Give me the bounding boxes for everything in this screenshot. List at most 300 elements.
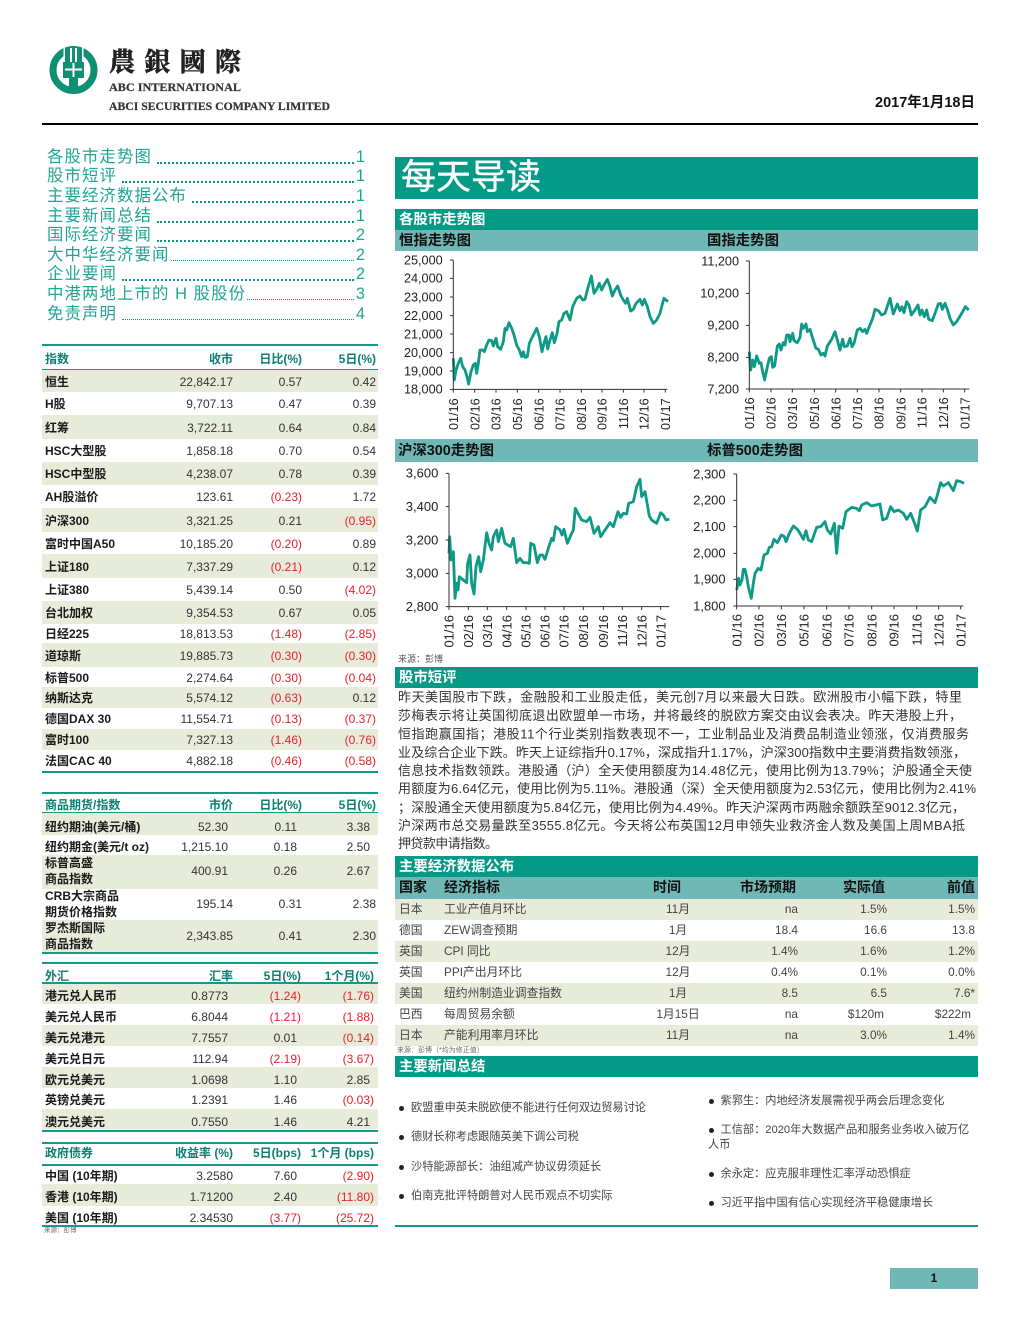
row 中国10年期: 3.2580 <box>196 1169 233 1183</box>
row 罗杰斯国际商品指数 <box>42 920 378 952</box>
row 标普500 <box>45 671 376 685</box>
row 纽约期油: 0.11 <box>275 820 297 834</box>
row 澳元兑美元: 4.21 <box>347 1115 370 1129</box>
row 美元兑人民币: (1.88) <box>343 1010 374 1024</box>
line chart: CSI 300: 3,400 <box>406 499 438 514</box>
line chart: S&P 500: 2,100 <box>693 519 726 534</box>
line chart: S&P 500: 05/16 <box>797 614 812 647</box>
row: Japan IP <box>395 899 978 920</box>
page number <box>890 1268 978 1289</box>
row: UK PPI: PPI产出月环比 <box>444 965 522 979</box>
line chart: Hang Seng Index: 09/16 <box>596 398 610 430</box>
toc entry <box>47 264 365 283</box>
row: Brazil trade: 巴西 <box>399 1007 423 1021</box>
toc entry: 主要经济数据公布 <box>47 187 187 205</box>
line chart: S&P 500: 1,800 <box>693 598 726 613</box>
row AH股溢价 <box>45 490 376 504</box>
row: Germany ZEW: ZEW调查预期 <box>444 923 517 937</box>
row 富时中国A50: 富时中国A50 <box>45 537 115 551</box>
toc entry <box>47 304 365 323</box>
row 富时100: 富时100 <box>45 733 89 747</box>
row: Germany ZEW: 德国 <box>399 923 423 937</box>
market commentary text: 沪深两市总交易量跌至3555.8亿元。今天将公布英国12月申领失业救济金人数及美国上周MBA抵 <box>398 818 965 833</box>
line chart: Hang Seng Index: 25,000 <box>404 253 443 267</box>
row 上证380: (4.02) <box>345 583 376 597</box>
row H股: 0.47 <box>279 397 302 411</box>
line chart: Hang Seng Index: 24,000 <box>404 272 443 286</box>
line chart: Hang Seng Index: 12/16 <box>638 398 652 430</box>
row 香港10年期: (11.80) <box>337 1190 374 1204</box>
toc entry: 各股市走势图 <box>47 148 152 166</box>
line chart: HSCEI: 01/17 <box>958 397 972 429</box>
toc entry: 大中华经济要闻 <box>47 246 169 264</box>
line chart: Hang Seng Index: 03/16 <box>490 398 504 430</box>
row HSC大型股: HSC大型股 <box>45 444 106 458</box>
table header: 日比(%) <box>259 352 302 366</box>
line chart: CSI 300: 3,600 <box>406 466 438 481</box>
row 标普高盛商品指数: 商品指数 <box>45 872 93 886</box>
toc entry <box>47 226 365 244</box>
row 美元兑日元: (3.67) <box>343 1052 374 1066</box>
row CRB大宗商品期货价格指数: CRB大宗商品 <box>45 889 119 903</box>
market commentary text: 业及综合企业下跌。昨天上证综指升0.17%，深成指升1.17%，沪深300指数中主要消费指数领涨， <box>398 745 966 760</box>
section heading: market charts: 各股市走势图 <box>399 212 485 228</box>
bottom rule <box>395 1225 978 1227</box>
row 英镑兑美元: 1.2391 <box>191 1093 228 1107</box>
line chart: CSI 300: 07/16 <box>557 615 572 648</box>
section heading: market commentary: 股市短评 <box>399 670 457 686</box>
line chart: Hang Seng Index: 08/16 <box>575 398 589 430</box>
toc entry: 股市短评 <box>47 167 117 185</box>
table: indices <box>42 344 378 773</box>
row 法国CAC 40: 4,882.18 <box>186 754 233 768</box>
company name: 農銀國際 <box>109 42 242 79</box>
toc entry <box>47 186 365 205</box>
news item: 工信部：2020年大数据产品和服务业务收入破万亿 <box>720 1124 969 1136</box>
row HSC中型股: 0.78 <box>279 467 302 481</box>
row 澳元兑美元 <box>42 1109 378 1129</box>
row: UK PPI: 0.1% <box>860 965 887 979</box>
line chart: S&P 500: 07/16 <box>842 614 857 647</box>
line chart: S&P 500: 2,200 <box>693 493 726 508</box>
row 红筹: 0.84 <box>353 421 376 435</box>
row HSC大型股: 1,858.18 <box>186 444 233 458</box>
table header: 收市 <box>209 352 233 366</box>
row 香港10年期: 香港 (10年期) <box>45 1190 118 1204</box>
row 恒生: 22,842.17 <box>180 375 233 389</box>
row 标普高盛商品指数 <box>42 855 378 889</box>
row 德国DAX 30 <box>45 712 376 726</box>
line chart: Hang Seng Index: 18,000 <box>404 383 443 397</box>
line chart: HSCEI: 11/16 <box>916 397 930 428</box>
row 标普高盛商品指数: 0.26 <box>274 864 297 878</box>
row 欧元兑美元: 欧元兑美元 <box>45 1073 105 1087</box>
table header: 实际值 <box>843 879 885 895</box>
row 美元兑日元: 112.94 <box>192 1052 228 1066</box>
row 纽约期油: 3.38 <box>347 820 370 834</box>
row 富时100: 7,327.13 <box>186 733 233 747</box>
row 红筹: 0.64 <box>279 421 302 435</box>
row: Japan capacity: na <box>785 1028 798 1042</box>
row 欧元兑美元: 2.85 <box>347 1073 370 1087</box>
row 德国DAX 30: (0.37) <box>345 712 376 726</box>
row 英镑兑美元: (0.03) <box>343 1093 374 1107</box>
line chart: HSCEI: 8,200 <box>707 351 739 365</box>
row 上证380: 5,439.14 <box>186 583 233 597</box>
row 上证180: (0.21) <box>271 560 302 574</box>
news item continuation: 人币 <box>708 1139 730 1151</box>
row: US Empire State: 1月 <box>669 986 687 1000</box>
news item: 习近平指中国有信心实现经济平稳健康增长 <box>720 1197 933 1209</box>
row 台北加权: 台北加权 <box>45 606 93 620</box>
row H股: H股 <box>45 397 66 411</box>
row: Japan IP: 11月 <box>666 902 690 916</box>
row 标普500: (0.30) <box>271 671 302 685</box>
market commentary text <box>398 689 978 851</box>
row 港元兑人民币: (1.76) <box>343 989 374 1003</box>
subheading: CSI 300 chart <box>395 439 707 462</box>
line chart: CSI 300: 3,200 <box>406 532 438 547</box>
row 台北加权: 0.67 <box>279 606 302 620</box>
toc entry: 免责声明 <box>47 305 117 323</box>
market commentary text: ；深股通全天使用额度为5.84亿元，使用比例为4.49%。昨天沪深两市两融余额跌至9012.3亿元， <box>398 800 965 816</box>
line chart: CSI 300: 11/16 <box>615 615 630 647</box>
row 沪深300: (0.95) <box>345 514 376 528</box>
line chart: CSI 300: 03/16 <box>480 615 495 648</box>
market commentary text: 恒指跑赢国指；港股11个行业类别指数表现不一，工业制品业及消费品制造业领涨，仅消费服务 <box>398 726 969 742</box>
row 沪深300 <box>42 508 378 532</box>
row: Germany ZEW <box>395 920 978 941</box>
table header: 市场预期 <box>740 879 796 895</box>
market commentary text: 昨天美国股市下跌，金融股和工业股走低，美元创7月以来最大日跌。欧洲股市小幅下跌，特里 <box>398 690 962 704</box>
row: Japan capacity: 3.0% <box>860 1028 887 1042</box>
row 美国10年期 <box>45 1211 374 1225</box>
row: Japan capacity <box>395 1025 978 1046</box>
table header: 市价 <box>209 798 233 812</box>
row 纽约期油: 52.30 <box>198 820 228 834</box>
table header <box>45 352 376 366</box>
toc entry: 2 <box>356 265 365 283</box>
logo <box>50 46 98 94</box>
row H股: 9,707.13 <box>186 397 233 411</box>
row: Brazil trade <box>395 1004 978 1025</box>
row 港元兑人民币 <box>42 984 378 1004</box>
row 台北加权 <box>42 601 378 624</box>
row 富时中国A50 <box>45 537 376 551</box>
line chart: S&P 500: 2,000 <box>693 546 726 561</box>
row 德国DAX 30: 德国DAX 30 <box>45 712 111 726</box>
table: government bonds <box>42 1142 378 1227</box>
row 美元兑日元 <box>45 1052 374 1066</box>
row: Japan capacity: 产能利用率月环比 <box>444 1028 538 1042</box>
row 美元兑港元: 7.7557 <box>191 1031 228 1045</box>
section heading: news summary: 主要新闻总结 <box>399 1059 485 1075</box>
line chart: CSI 300: 01/17 <box>653 615 668 648</box>
row: Brazil trade: $120m <box>848 1007 884 1021</box>
row 标普高盛商品指数: 标普高盛 <box>45 856 93 870</box>
row 罗杰斯国际商品指数: 2,343.85 <box>186 929 233 943</box>
row 法国CAC 40 <box>45 754 376 768</box>
line chart: CSI 300: 01/16 <box>442 615 457 648</box>
row 港元兑人民币: 0.8773 <box>191 989 228 1003</box>
table of contents <box>47 148 365 323</box>
company name <box>109 42 330 113</box>
source note: bonds: 来源：彭博 <box>44 1227 76 1234</box>
news item: 伯南克批评特朗普对人民币观点不切实际 <box>411 1190 612 1202</box>
row CRB大宗商品期货价格指数: 195.14 <box>196 897 233 911</box>
table header <box>45 969 374 983</box>
row: US Empire State: 6.5 <box>871 986 887 1000</box>
row: Japan capacity: 日本 <box>399 1028 423 1042</box>
row 上证380 <box>45 583 376 597</box>
market commentary text: 莎梅表示将让英国彻底退出欧盟单一市场，并将最终的脱欧方案交由议会表决。昨天港股上升， <box>398 708 962 723</box>
row 美元兑港元 <box>42 1025 378 1046</box>
row 上证180 <box>42 554 378 578</box>
row 道琼斯: (0.30) <box>271 649 302 663</box>
row: US Empire State <box>395 983 978 1004</box>
line chart: HSCEI: 06/16 <box>829 397 843 429</box>
line chart: HSCEI: 9,200 <box>707 319 739 333</box>
line chart: CSI 300: 09/16 <box>596 615 611 648</box>
row 日经225: 日经225 <box>45 627 89 641</box>
row HSC大型股: 0.54 <box>353 444 376 458</box>
row: Japan capacity: 11月 <box>666 1028 690 1042</box>
row 日经225 <box>45 627 376 641</box>
row: UK PPI <box>395 962 978 983</box>
line chart: CSI 300 <box>406 466 670 648</box>
table header: 汇率 <box>209 969 233 983</box>
row 罗杰斯国际商品指数: 0.41 <box>279 929 302 943</box>
row CRB大宗商品期货价格指数: 2.38 <box>353 897 376 911</box>
section heading: news summary <box>395 1056 978 1077</box>
table: economic data <box>395 877 978 1046</box>
row 富时中国A50: 0.89 <box>353 537 376 551</box>
row 欧元兑美元: 1.0698 <box>191 1073 228 1087</box>
toc entry <box>47 166 365 185</box>
row 澳元兑美元: 0.7550 <box>191 1115 228 1129</box>
table header: 经济指标 <box>444 879 500 895</box>
row AH股溢价: 1.72 <box>353 490 376 504</box>
row H股: 0.39 <box>353 397 376 411</box>
line chart: S&P 500: 06/16 <box>819 614 834 647</box>
source note: charts: 来源：彭博 <box>398 654 443 664</box>
row 道琼斯: 道琼斯 <box>45 649 81 663</box>
table: commodities <box>42 792 378 954</box>
row 欧元兑美元: 1.10 <box>274 1073 297 1087</box>
row 香港10年期 <box>42 1184 378 1206</box>
news item: 紫郛生：内地经济发展需视乎两会后理念变化 <box>720 1095 944 1107</box>
row 日经225: 18,813.53 <box>180 627 233 641</box>
table header <box>395 877 978 899</box>
row 美元兑日元: 美元兑日元 <box>45 1052 105 1066</box>
row 美国10年期: 美国 (10年期) <box>45 1211 118 1225</box>
news item: 余永定：应克服非理性汇率浮动恐惧症 <box>720 1168 911 1180</box>
section heading: economic data <box>395 856 978 877</box>
subheading: HSCEI chart: 国指走势图 <box>707 233 779 249</box>
row 纽约期金 <box>45 840 370 854</box>
table header <box>45 798 376 812</box>
row: Brazil trade: $222m <box>935 1007 971 1021</box>
row CRB大宗商品期货价格指数: 0.31 <box>279 897 302 911</box>
row: Japan IP: 工业产值月环比 <box>444 902 527 916</box>
row: Brazil trade: 1月15日 <box>656 1007 700 1021</box>
line chart: HSCEI: 05/16 <box>808 397 822 429</box>
row: US Empire State: 8.5 <box>782 986 798 1000</box>
row: UK CPI: 1.6% <box>860 944 887 958</box>
table header: 外汇 <box>45 969 69 983</box>
row 富时100: (0.76) <box>345 733 376 747</box>
row 美元兑人民币: 6.8044 <box>191 1010 228 1024</box>
row: US Empire State: 美国 <box>399 986 423 1000</box>
row 标普500: 2,274.64 <box>186 671 233 685</box>
line chart: Hang Seng Index: 23,000 <box>404 290 443 304</box>
row 英镑兑美元 <box>45 1093 374 1107</box>
company name: ABC INTERNATIONAL <box>109 82 241 94</box>
row: UK CPI: 12月 <box>666 944 690 958</box>
subheading: HSI chart: 恒指走势图 <box>399 233 471 249</box>
row 上证180: 0.12 <box>353 560 376 574</box>
row: UK CPI: CPI 同比 <box>444 944 491 958</box>
toc entry: 3 <box>356 285 365 303</box>
row 罗杰斯国际商品指数: 罗杰斯国际 <box>45 921 105 935</box>
source note: economic data: 来源：彭博（*均为修正值） <box>397 1047 484 1054</box>
row 道琼斯: (0.30) <box>345 649 376 663</box>
market commentary text: 用额度为6.64亿元，使用比例为5.11%。港股通（深）全天使用额度为2.53亿元，使用比例为2.41% <box>398 781 976 796</box>
row 红筹: 红筹 <box>45 421 69 435</box>
line chart: HSCEI: 08/16 <box>873 397 887 429</box>
line chart: CSI 300: 2,800 <box>406 599 438 614</box>
table: foreign exchange <box>42 962 378 1132</box>
row AH股溢价: (0.23) <box>271 490 302 504</box>
table header: 时间 <box>653 879 681 895</box>
row 纽约期金: 2.50 <box>347 840 370 854</box>
subheading: HSCEI chart <box>707 230 978 251</box>
line chart: Hang Seng Index: 05/16 <box>511 398 525 430</box>
table header: 5日(%) <box>339 352 376 366</box>
row AH股溢价: 123.61 <box>196 490 233 504</box>
row 恒生: 恒生 <box>45 375 69 389</box>
row 道琼斯: 19,885.73 <box>180 649 233 663</box>
row CRB大宗商品期货价格指数 <box>45 889 376 919</box>
row 纽约期油 <box>42 813 378 835</box>
row 港元兑人民币: 港元兑人民币 <box>45 989 117 1003</box>
news list: left column <box>399 1100 689 1204</box>
row 上证380: 上证380 <box>45 583 89 597</box>
toc entry: 2 <box>356 226 365 244</box>
row: UK CPI: 1.4% <box>771 944 798 958</box>
row 欧元兑美元 <box>42 1067 378 1088</box>
row 上证180: 上证180 <box>45 560 89 574</box>
table header: 指数 <box>45 352 69 366</box>
toc entry: 1 <box>356 207 365 225</box>
line chart: S&P 500: 02/16 <box>752 614 767 647</box>
table header: 收益率 (%) <box>175 1146 233 1160</box>
row HSC中型股: 4,238.07 <box>186 467 233 481</box>
row 红筹: 3,722.11 <box>187 421 233 435</box>
row: Germany ZEW: 1月 <box>669 923 687 937</box>
toc entry: 主要新闻总结 <box>47 207 152 225</box>
row 纳斯达克: 纳斯达克 <box>45 691 93 705</box>
line chart: S&P 500: 11/16 <box>909 614 924 646</box>
row 中国10年期 <box>45 1169 374 1183</box>
row: UK CPI: 英国 <box>399 944 423 958</box>
row CRB大宗商品期货价格指数: 期货价格指数 <box>45 905 117 919</box>
line chart: Hang Seng Index: 06/16 <box>532 398 546 430</box>
row 美元兑人民币 <box>45 1010 374 1024</box>
table header: 1个月 (bps) <box>311 1146 374 1160</box>
line chart: HSCEI: 09/16 <box>894 397 908 429</box>
news item: 德财长称考虑跟随英美下调公司税 <box>411 1131 579 1143</box>
line chart: Hang Seng Index: 19,000 <box>404 364 443 378</box>
line chart: HSCEI: 11,200 <box>701 254 739 268</box>
row 恒生: 0.42 <box>353 375 376 389</box>
row 标普500: (0.04) <box>345 671 376 685</box>
row 美元兑港元: 0.01 <box>274 1031 297 1045</box>
row 纳斯达克 <box>42 687 378 708</box>
row: Japan IP: 1.5% <box>860 902 887 916</box>
line chart: HSCEI: 07/16 <box>851 397 865 429</box>
row 富时100: (1.46) <box>271 733 302 747</box>
row 标普高盛商品指数: 2.67 <box>347 864 370 878</box>
subheading: S&P 500 chart: 标普500走势图 <box>707 443 803 459</box>
toc entry <box>47 148 365 166</box>
row 港元兑人民币: (1.24) <box>270 989 301 1003</box>
line chart: Hang Seng Index: 01/16 <box>447 398 461 430</box>
row 上证380: 0.50 <box>279 583 302 597</box>
table header: 商品期货/指数 <box>45 798 120 812</box>
row 美国10年期: (25.72) <box>336 1211 374 1225</box>
row 英镑兑美元: 英镑兑美元 <box>45 1093 105 1107</box>
line chart: CSI 300: 3,000 <box>406 566 438 581</box>
line chart: CSI 300: 05/16 <box>519 615 534 648</box>
row 标普500: 标普500 <box>45 671 89 685</box>
line chart: CSI 300: 08/16 <box>576 615 591 648</box>
toc entry: 1 <box>356 167 365 185</box>
table header: 国家 <box>399 879 427 895</box>
row 中国10年期: 7.60 <box>274 1169 297 1183</box>
row 美国10年期: 2.34530 <box>190 1211 233 1225</box>
line chart: Hang Seng Index: 01/17 <box>659 398 673 430</box>
toc entry: 企业要闻 <box>47 265 117 283</box>
news item: 沙特能源部长：油组减产协议毋须延长 <box>411 1161 601 1173</box>
toc entry: 国际经济要闻 <box>47 226 152 244</box>
row: Germany ZEW: 16.6 <box>864 923 887 937</box>
row 美元兑人民币: 美元兑人民币 <box>45 1010 117 1024</box>
table header: 1个月(%) <box>325 969 374 983</box>
row: Germany ZEW: 13.8 <box>952 923 975 937</box>
row: US Empire State: 纽约州制造业调查指数 <box>444 986 562 1000</box>
table header: 日比(%) <box>259 798 302 812</box>
line chart: CSI 300: 06/16 <box>538 615 553 648</box>
row 纽约期金: 1,215.10 <box>181 840 228 854</box>
market commentary text: 押贷款申请指数。 <box>398 836 498 851</box>
row 纳斯达克: (0.63) <box>271 691 302 705</box>
row 日经225: (1.48) <box>271 627 302 641</box>
row 澳元兑美元: 1.46 <box>274 1115 297 1129</box>
row: Brazil trade: 每周贸易余额 <box>444 1007 515 1021</box>
line chart: S&P 500: 12/16 <box>931 614 946 647</box>
row: Japan IP: 日本 <box>399 902 423 916</box>
row 富时中国A50: 10,185.20 <box>180 537 233 551</box>
line chart: HSCEI: 02/16 <box>765 397 779 429</box>
row 恒生 <box>42 370 378 392</box>
toc entry: 1 <box>356 148 365 166</box>
row HSC大型股 <box>45 444 376 458</box>
report date: 2017年1月18日 <box>875 95 975 111</box>
row 台北加权: 0.05 <box>353 606 376 620</box>
row: UK PPI: 12月 <box>666 965 690 979</box>
toc entry: 中港两地上市的 H 股股份 <box>47 285 246 303</box>
